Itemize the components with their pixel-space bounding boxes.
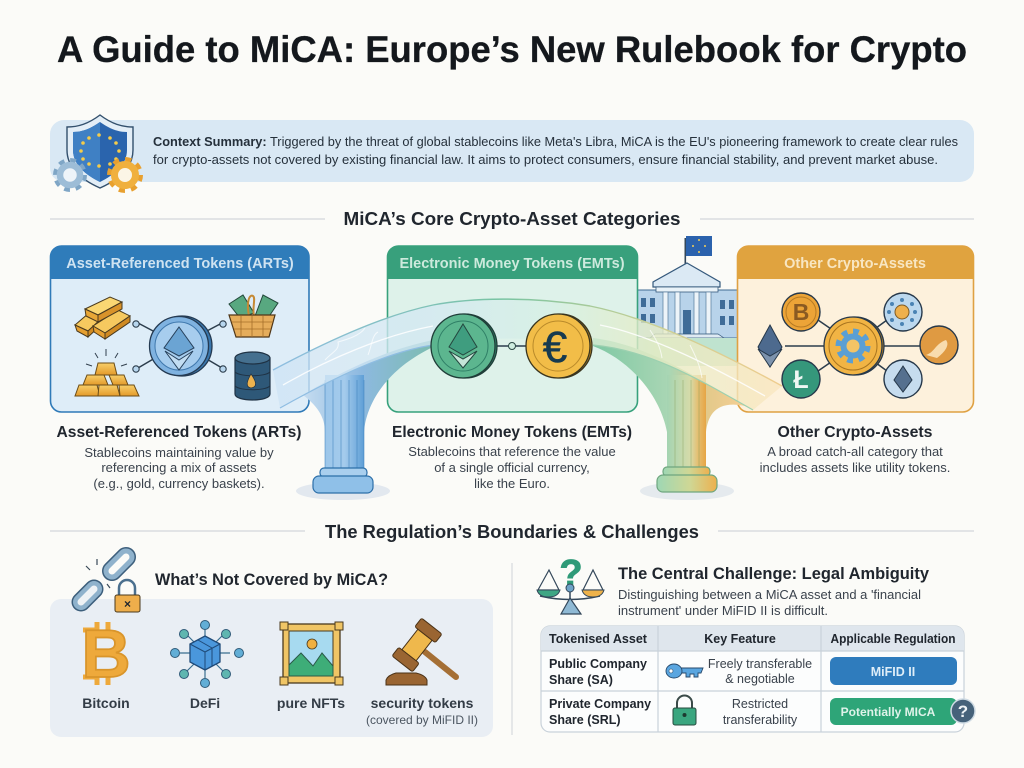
icon: EMT coins	[431, 314, 592, 378]
icon: scales with question mark	[537, 553, 604, 614]
label: covered by MiFID II: (covered by MiFID II)	[366, 713, 478, 727]
icon: EU shield with gears	[56, 115, 140, 190]
text block: other description	[760, 424, 950, 475]
icon: oil barrel	[235, 352, 270, 400]
text block: ARTs description: referencing a mix of assets	[101, 460, 257, 475]
icon: gavel	[386, 618, 456, 685]
text block: central challenge	[618, 565, 930, 618]
text block: ARTs description: Stablecoins maintaining value by	[84, 445, 274, 460]
text block: EMTs description: of a single official currency,	[434, 460, 590, 475]
text block: other description: includes assets like utility tokens.	[760, 460, 950, 475]
icon: gold bars	[75, 297, 130, 339]
row: public company share: & negotiable	[725, 672, 795, 686]
panel: what's not covered	[50, 599, 493, 737]
table: regulation comparison	[541, 626, 975, 732]
icon: scales with question mark: ?	[559, 553, 583, 595]
row: public company share: Freely transferable	[708, 657, 812, 671]
label: Bitcoin: Bitcoin	[82, 695, 130, 711]
row: private company share: Restricted	[732, 697, 788, 711]
text block: EMTs description: Electronic Money Tokens (EMTs)	[392, 424, 632, 441]
text: context summary: Context Summary: Triggered by the threat of global stablecoins like Meta's Libra, MiCA is the EU's pioneering framework to create clear rules	[153, 135, 943, 149]
icon: gold pyramid	[75, 349, 139, 396]
table header: Tokenised Asset	[549, 632, 648, 646]
icon: ART central token	[133, 316, 226, 376]
row: public company share: Public Company	[549, 657, 647, 671]
icon: EMT coins: €	[543, 323, 567, 372]
heading: what's not covered: What’s Not Covered by MiCA?	[155, 571, 388, 589]
text block: EMTs description	[392, 424, 632, 491]
table header: Key Feature	[704, 632, 776, 646]
text block: other description: Other Crypto-Assets	[778, 424, 933, 441]
illustration: EU parliament building	[636, 236, 738, 366]
icon: broken chain and padlock	[81, 557, 140, 612]
row: public company share: Share (SA)	[549, 673, 613, 687]
row: private company share: Private Company	[549, 697, 651, 711]
text block: ARTs description: Asset-Referenced Tokens (ARTs)	[56, 424, 302, 441]
table header: Applicable Regulation	[830, 632, 956, 646]
icon: broken chain and padlock: ×	[124, 597, 131, 611]
text block: central challenge: instrument' under MiFID II is difficult.	[618, 603, 828, 618]
icon: other crypto network	[758, 293, 958, 398]
row: private company share: transferability	[723, 713, 798, 727]
heading: boundaries and challenges: The Regulation’s Boundaries & Challenges	[325, 522, 699, 542]
label: security tokens: security tokens	[371, 695, 474, 711]
icon: NFT picture frame	[280, 622, 343, 685]
heading: core categories: MiCA’s Core Crypto-Asset Categories	[344, 208, 680, 229]
table header	[549, 632, 956, 646]
icon: basket of cash	[229, 295, 278, 337]
text block: EMTs description: like the Euro.	[474, 476, 550, 491]
icon: other crypto network: B	[793, 299, 809, 325]
card header: ARTs: Asset-Referenced Tokens (ARTs)	[66, 256, 294, 272]
icon: question badge	[951, 699, 975, 723]
text block: EMTs description: Stablecoins that reference the value	[408, 444, 616, 459]
row: public company share: MiFID II	[871, 665, 915, 679]
row: private company share: Potentially MICA	[841, 705, 936, 719]
label: pure NFTs: pure NFTs	[277, 695, 345, 711]
card header: other: Other Crypto-Assets	[784, 256, 926, 272]
text block: ARTs description: (e.g., gold, currency baskets).	[93, 476, 265, 491]
icon: DeFi network	[170, 620, 244, 688]
row: public company share	[549, 657, 957, 687]
text block: ARTs description	[56, 424, 302, 491]
illustration: bridge arch and pillars	[273, 299, 782, 500]
text block: central challenge: Distinguishing between a MiCA asset and a 'financial	[618, 587, 921, 602]
panel: other crypto-assets card	[737, 246, 974, 412]
row: private company share: Share (SRL)	[549, 713, 621, 727]
panel: EMTs card	[387, 246, 638, 412]
row: private company share	[549, 696, 957, 727]
text block: central challenge: The Central Challenge: Legal Ambiguity	[618, 565, 930, 583]
icon: bitcoin: B	[81, 616, 131, 692]
card header: EMTs: Electronic Money Tokens (EMTs)	[399, 256, 625, 272]
text: context summary: for crypto-assets not covered by existing financial law. It aims to protect consumers, ensure financial stability, and prevent market abuse.	[153, 153, 938, 167]
icon: other crypto network: Ł	[793, 366, 809, 394]
panel: context summary	[50, 120, 974, 182]
panel: ARTs card	[50, 246, 309, 412]
text block: other description: A broad catch-all category that	[767, 444, 943, 459]
icon: question badge: ?	[958, 702, 968, 721]
title: A Guide to MiCA: Europe’s New Rulebook for Crypto	[57, 29, 967, 70]
label: DeFi: DeFi	[190, 695, 220, 711]
